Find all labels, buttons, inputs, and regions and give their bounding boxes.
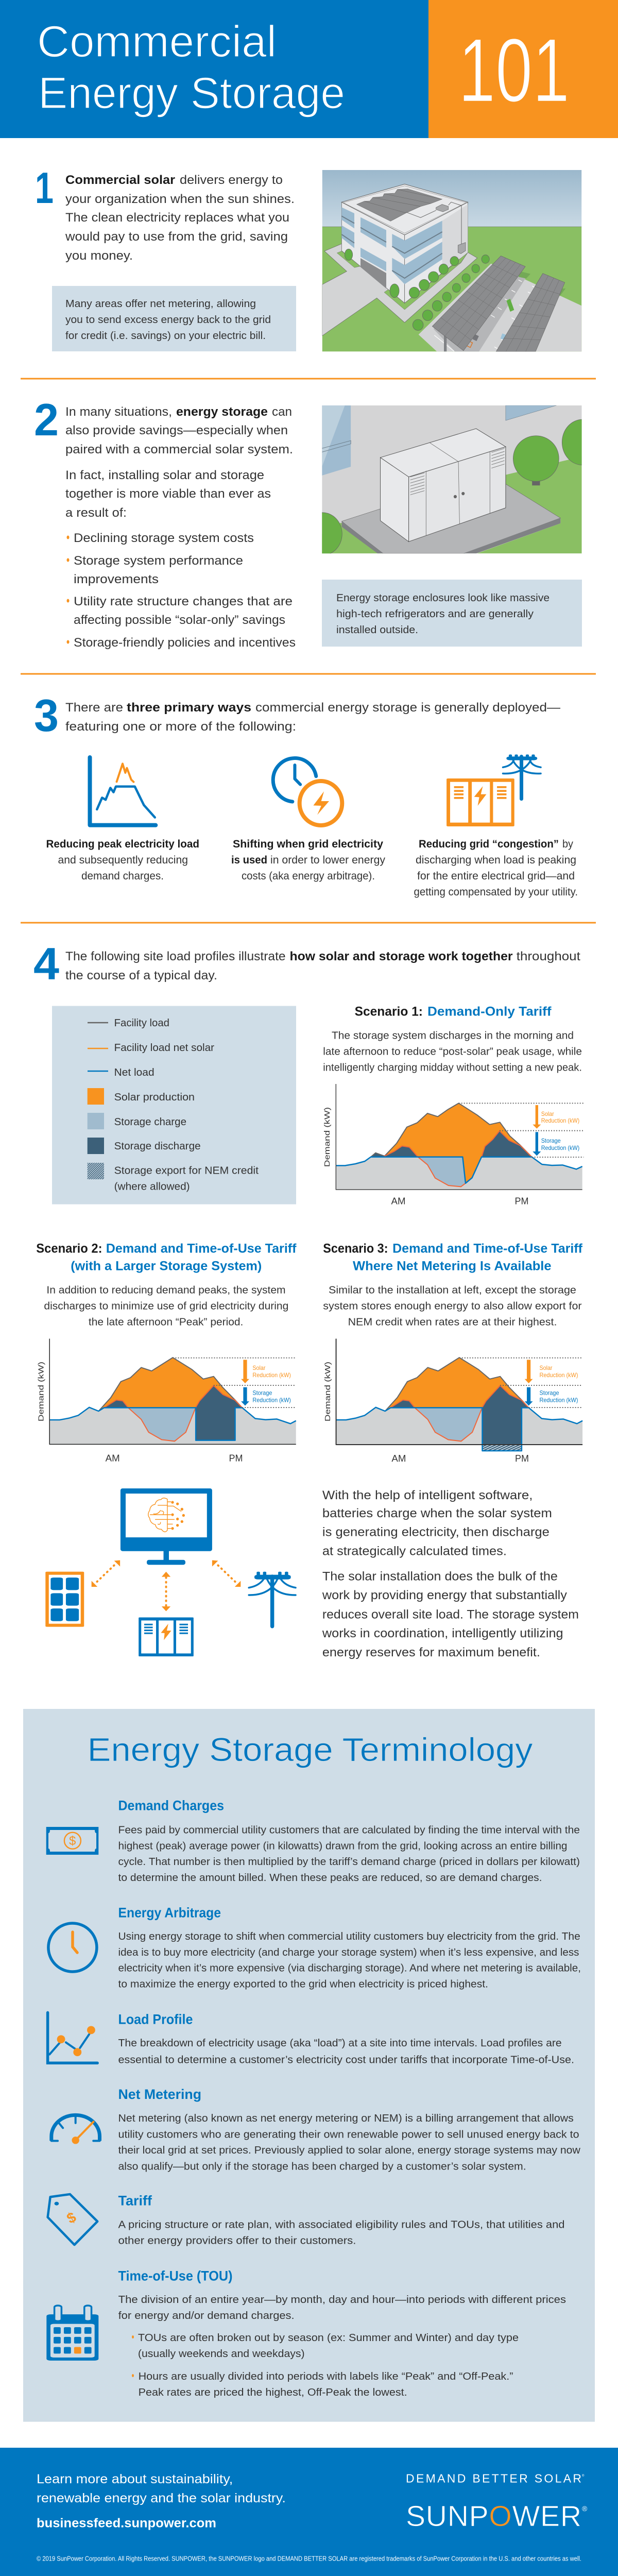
chart: scenario 1 load profile bbox=[323, 1084, 583, 1207]
panel: scenario 3 bbox=[323, 1242, 583, 1464]
icon: clock and energy coin bbox=[273, 758, 342, 825]
bullet list: reasons bbox=[67, 531, 296, 650]
term: energy arbitrage bbox=[48, 1905, 581, 1990]
icon: utility pole bbox=[249, 1572, 296, 1626]
section 1 text: delivers energy to bbox=[180, 173, 283, 187]
term: tariff: Tariff bbox=[118, 2193, 152, 2209]
legend: facility load: Facility load bbox=[114, 1018, 169, 1029]
section 2 intro text: energy storage bbox=[176, 405, 268, 419]
arrows: data flows between monitor and devices bbox=[92, 1560, 241, 1611]
heading: scenario 2 bbox=[36, 1242, 297, 1274]
chart: scenario 3 load profile: Reduction (kW) bbox=[540, 1397, 578, 1404]
callout: net metering: Many areas offer net metering, allowing bbox=[65, 298, 256, 310]
icon: gauge bbox=[52, 2115, 100, 2144]
header banner bbox=[0, 0, 618, 138]
term: net metering bbox=[52, 2087, 580, 2172]
callout: storage enclosures bbox=[322, 580, 582, 647]
chart: scenario 2 load profile: Reduction (kW) bbox=[252, 1371, 291, 1379]
section 3 intro text: three primary ways bbox=[127, 701, 251, 715]
callout: net metering: for credit (i.e. savings) on your electric bill. bbox=[65, 330, 266, 342]
term: net metering: their local grid at set prices. Previously applied to solar alone, energy storage systems may now bbox=[118, 2145, 580, 2156]
term: tariff: A pricing structure or rate plan, with associated eligibility rules and TOUs, that utilities and bbox=[118, 2219, 564, 2230]
panel: scenario 2 bbox=[36, 1242, 297, 1464]
way 3: reducing grid congestion bbox=[414, 754, 578, 898]
scenario 1 description bbox=[323, 1030, 582, 1074]
way 3 text: for the entire electrical grid—and bbox=[417, 870, 575, 882]
section 1 text: Commercial solar bbox=[65, 173, 175, 187]
bullet list: TOU notes: Hours are usually divided into periods with labels like “Peak” and “Off-Peak.” bbox=[139, 2371, 513, 2382]
call to action text: Learn more about sustainability, bbox=[37, 2472, 233, 2486]
section 2 intro text: together is more viable than ever as bbox=[65, 487, 271, 501]
chart: scenario 2 load profile: Demand (kW) bbox=[37, 1362, 46, 1421]
chart: scenario 1 load profile: Storage bbox=[541, 1137, 561, 1144]
section 3 intro text bbox=[65, 701, 560, 734]
panel: energy storage terminology bbox=[23, 1709, 595, 2422]
icon: load chart with clipped peak bbox=[90, 757, 156, 825]
legend: net load: Net load bbox=[114, 1067, 154, 1078]
call to action text: renewable energy and the solar industry. bbox=[37, 2491, 286, 2505]
section 2 intro text: In fact, installing solar and storage bbox=[65, 468, 264, 482]
chart: scenario 2 load profile: Reduction (kW) bbox=[252, 1397, 291, 1404]
explanatory text: With the help of intelligent software, bbox=[322, 1488, 533, 1502]
step number 2: 2 bbox=[34, 394, 59, 445]
legend: storage export: (where allowed) bbox=[114, 1181, 190, 1193]
step number 4: 4 bbox=[33, 938, 59, 989]
explanatory text: is generating electricity, then discharge bbox=[322, 1526, 550, 1539]
section 2 intro text: also provide savings—especially when bbox=[65, 423, 288, 437]
way 2 text: Shifting when grid electricity bbox=[233, 838, 383, 850]
icon: banknote bbox=[46, 1827, 98, 1855]
section 3 intro text: commercial energy storage is generally deployed— bbox=[255, 701, 560, 715]
chart: scenario 2 load profile bbox=[37, 1338, 296, 1464]
legend: facility load net solar: Facility load net solar bbox=[114, 1042, 214, 1054]
way 1 text: Reducing peak electricity load bbox=[46, 838, 199, 850]
way 2 text bbox=[231, 838, 385, 882]
term: time-of-use: Time-of-Use (TOU) bbox=[118, 2268, 233, 2283]
term: energy arbitrage: Energy Arbitrage bbox=[118, 1905, 221, 1921]
bullet list: TOU notes: TOUs are often broken out by season (ex: Summer and Winter) and day type bbox=[138, 2332, 519, 2344]
term: time-of-use: The division of an entire year—by month, day and hour—into periods with different prices bbox=[118, 2294, 566, 2306]
icon: line chart bbox=[48, 2012, 97, 2063]
heading: scenario 3: Demand and Time-of-Use Tariff bbox=[392, 1242, 583, 1256]
legend: storage discharge bbox=[88, 1138, 201, 1154]
title: Energy Storage bbox=[38, 69, 345, 118]
explanatory text: energy reserves for maximum benefit. bbox=[322, 1646, 540, 1659]
scenario 1 description: late afternoon to reduce “post-solar” peak usage, while bbox=[323, 1046, 582, 1057]
term: load profile: The breakdown of electricity usage (aka “load”) at a site into time intervals. Load profiles are bbox=[118, 2038, 562, 2049]
way 2: shifting when grid electricity is used bbox=[231, 758, 385, 882]
icon: brain bbox=[148, 1498, 185, 1532]
heading: scenario 3: Where Net Metering Is Available bbox=[353, 1259, 552, 1274]
term: load profile: Load Profile bbox=[118, 2012, 193, 2027]
term: demand charges: cycle. That number is then multiplied by the tariff’s demand charge (priced in dollars per kilowatt) bbox=[118, 1856, 580, 1868]
section 1 text: your organization when the sun shines. bbox=[65, 192, 295, 206]
tagline: demand better solar: DEMAND BETTER SOLAR bbox=[406, 2471, 581, 2485]
icon: clock bbox=[48, 1923, 97, 1972]
chart: scenario 2 load profile: PM bbox=[229, 1453, 243, 1464]
section 3: three primary ways bbox=[21, 674, 596, 898]
term: tariff: other energy providers offer to their customers. bbox=[118, 2235, 356, 2246]
scenario 2 description bbox=[44, 1285, 288, 1328]
logo: sunpower: SUNPOWER bbox=[406, 2500, 581, 2533]
section 4 intro text: throughout bbox=[517, 950, 580, 963]
section 2 intro text: can bbox=[272, 405, 292, 419]
way 1 text: and subsequently reducing bbox=[58, 854, 188, 866]
bullet list: reasons: Utility rate structure changes that are bbox=[74, 595, 293, 608]
legend: net load bbox=[88, 1067, 154, 1078]
heading: scenario 2: Demand and Time-of-Use Tariff bbox=[106, 1242, 297, 1256]
chart: scenario 3 load profile: Solar bbox=[540, 1364, 553, 1371]
term: demand charges: to determine the amount billed. When these peaks are reduced, so are demand charges. bbox=[118, 1872, 542, 1884]
scenario 1 description: The storage system discharges in the morning and bbox=[332, 1030, 574, 1041]
icon: storage unit bbox=[139, 1617, 194, 1656]
bullet list: TOU notes bbox=[132, 2332, 519, 2398]
illustration: energy storage enclosure bbox=[322, 405, 582, 553]
icon: storage cabinet and utility pole bbox=[447, 754, 541, 826]
title: Commercial bbox=[37, 17, 277, 66]
panel: scenario 1 bbox=[323, 1004, 583, 1207]
step number 1: 1 bbox=[35, 164, 54, 213]
section 4 intro text: how solar and storage work together bbox=[289, 950, 513, 963]
section 4 intro text bbox=[65, 950, 580, 982]
logo: sunpower: ® bbox=[582, 2504, 588, 2513]
callout: net metering: you to send excess energy back to the grid bbox=[65, 314, 271, 326]
section 3 intro text: featuring one or more of the following: bbox=[65, 720, 296, 734]
explanatory text: batteries charge when the solar system bbox=[322, 1506, 552, 1520]
term: time-of-use bbox=[46, 2268, 566, 2398]
heading: scenario 3: Scenario 3: bbox=[323, 1242, 388, 1256]
footer bbox=[0, 2448, 618, 2576]
section 2 intro text: a result of: bbox=[65, 506, 127, 520]
section 4: site load profiles bbox=[21, 923, 596, 1659]
term: load profile: essential to determine a customer’s electricity cost under tariffs that incorporate Time-of-Use. bbox=[118, 2054, 574, 2065]
section 2 intro text bbox=[65, 405, 293, 520]
section 3 intro text: There are bbox=[65, 701, 123, 715]
section 1 text: you money. bbox=[65, 249, 133, 263]
explanatory text: works in coordination, intelligently utilizing bbox=[322, 1626, 563, 1640]
icon: price tag bbox=[48, 2194, 97, 2245]
term: net metering: Net Metering bbox=[118, 2087, 201, 2102]
scenario 2 description: discharges to minimize use of grid electricity during bbox=[44, 1301, 288, 1312]
way 1: reducing peak load bbox=[46, 757, 199, 882]
section 4 intro text: the course of a typical day. bbox=[65, 969, 217, 982]
chart: scenario 3 load profile: AM bbox=[391, 1453, 406, 1464]
section 1 text: The clean electricity replaces what you bbox=[65, 211, 289, 225]
icon: calendar bbox=[46, 2306, 98, 2361]
way 1 text bbox=[46, 838, 199, 882]
term: net metering: utility customers who are generating their own renewable power to sell unused energy back to bbox=[118, 2129, 579, 2140]
term: energy arbitrage: to maximize the energy exported to the grid when electricity is priced highest. bbox=[118, 1979, 488, 1990]
way 2 text: in order to lower energy bbox=[270, 854, 385, 866]
section 2 intro text: In many situations, bbox=[65, 405, 172, 419]
icon: price tag: $ bbox=[64, 2209, 79, 2227]
chart: scenario 1 load profile: Reduction (kW) bbox=[541, 1117, 579, 1124]
section 2: energy storage bbox=[21, 379, 603, 650]
heading: scenario 2: Scenario 2: bbox=[36, 1242, 102, 1256]
chart: scenario 1 load profile: Reduction (kW) bbox=[541, 1144, 579, 1151]
way 1 text: demand charges. bbox=[81, 870, 164, 882]
chart: scenario 2 load profile: AM bbox=[106, 1453, 120, 1464]
heading: energy storage terminology: Energy Storage Terminology bbox=[88, 1731, 533, 1768]
way 3 text bbox=[414, 838, 578, 898]
chart: scenario 3 load profile: Storage bbox=[540, 1389, 559, 1397]
chart: scenario 2 load profile: Solar bbox=[252, 1364, 265, 1371]
term: time-of-use: for energy and/or demand charges. bbox=[118, 2310, 295, 2321]
callout: storage enclosures: installed outside. bbox=[336, 624, 418, 636]
way 3 text: by bbox=[562, 838, 573, 850]
diagram: intelligent software connecting solar, storage and grid bbox=[45, 1488, 579, 1659]
explanatory text: The solar installation does the bulk of the bbox=[322, 1570, 558, 1584]
way 2 text: costs (aka energy arbitrage). bbox=[242, 870, 375, 882]
section 1 text: would pay to use from the grid, saving bbox=[65, 230, 288, 244]
callout: storage enclosures: high-tech refrigerators and are generally bbox=[336, 608, 534, 620]
legend: storage export bbox=[88, 1163, 259, 1193]
term: energy arbitrage: Using energy storage to shift when commercial utility customers buy electricity from the grid. The bbox=[118, 1931, 580, 1942]
bullet list: reasons: Storage-friendly policies and incentives bbox=[74, 636, 296, 650]
section 4 intro text: The following site load profiles illustrate bbox=[65, 950, 286, 963]
section 2 intro text: paired with a commercial solar system. bbox=[65, 443, 293, 456]
chart: scenario 1 load profile: PM bbox=[515, 1196, 528, 1207]
bullet list: reasons: improvements bbox=[74, 572, 159, 586]
heading: scenario 1 bbox=[355, 1004, 552, 1019]
illustration: commercial building with rooftop solar and solar carports bbox=[322, 170, 581, 351]
scenario 3 description: Similar to the installation at left, except the storage bbox=[329, 1285, 576, 1296]
way 2 text: is used bbox=[231, 854, 267, 866]
chart: scenario 1 load profile: Solar bbox=[541, 1110, 554, 1117]
chart: scenario 3 load profile: Reduction (kW) bbox=[540, 1371, 578, 1379]
way 3 text: Reducing grid “congestion” bbox=[419, 838, 559, 850]
term: load profile bbox=[48, 2012, 574, 2065]
panel: chart legend bbox=[52, 1006, 296, 1205]
chart: scenario 3 load profile: Demand (kW) bbox=[323, 1362, 332, 1421]
legend: solar production: Solar production bbox=[114, 1092, 195, 1103]
bullet list: TOU notes: Peak rates are priced the highest, Off-Peak the lowest. bbox=[139, 2387, 407, 2398]
chart: scenario 3 load profile: PM bbox=[515, 1453, 529, 1464]
term: net metering: also qualify—but only if the storage has been charged by a customer’s solar system. bbox=[118, 2161, 526, 2172]
chart: scenario 1 load profile: AM bbox=[391, 1196, 406, 1207]
scenario 3 description: NEM credit when rates are at their highest. bbox=[348, 1316, 557, 1328]
title number 101: 101 bbox=[458, 20, 570, 121]
legend: storage export: Storage export for NEM credit bbox=[114, 1165, 259, 1177]
scenario 2 description: In addition to reducing demand peaks, the system bbox=[46, 1285, 286, 1296]
scenario 2 description: the late afternoon “Peak” period. bbox=[89, 1316, 243, 1328]
term: demand charges: Fees paid by commercial utility customers that are calculated by finding the time interval with the bbox=[118, 1824, 580, 1836]
term: energy arbitrage: electricity when it’s more expensive (via discharging storage). And where net metering is available, bbox=[118, 1963, 581, 1974]
explanatory text: work by providing energy that substantially bbox=[322, 1588, 567, 1602]
call to action text: businessfeed.sunpower.com bbox=[37, 2516, 216, 2531]
term: energy arbitrage: idea is to buy more electricity (and charge your storage system) when it’s less expensive, and less bbox=[118, 1947, 579, 1958]
chart: scenario 3 load profile bbox=[323, 1338, 582, 1464]
bullet list: TOU notes: (usually weekends and weekdays) bbox=[138, 2348, 305, 2360]
chart: scenario 2 load profile: Storage bbox=[252, 1389, 272, 1397]
bullet list: reasons: Storage system performance bbox=[74, 554, 243, 568]
term: demand charges: Demand Charges bbox=[118, 1798, 224, 1813]
scenario 1 description: intelligently charging midday without setting a new peak. bbox=[323, 1062, 582, 1074]
step number 3: 3 bbox=[34, 690, 59, 741]
heading: scenario 1: Scenario 1: bbox=[355, 1004, 423, 1019]
icon: solar panel bbox=[45, 1572, 84, 1627]
callout: storage enclosures: Energy storage enclosures look like massive bbox=[336, 592, 550, 604]
term: net metering: Net metering (also known as net energy metering or NEM) is a billing arrangement that allows bbox=[118, 2113, 574, 2124]
chart: scenario 1 load profile: Demand (kW) bbox=[323, 1107, 332, 1167]
legend: storage charge bbox=[88, 1113, 186, 1129]
section 1 text bbox=[65, 173, 295, 263]
legend: storage discharge: Storage discharge bbox=[114, 1141, 201, 1152]
way 3 text: getting compensated by your utility. bbox=[414, 886, 578, 898]
term: demand charges: highest (peak) average power (in kilowatts) drawn from the grid, looking across an entire billing bbox=[118, 1840, 568, 1852]
bullet list: reasons: affecting possible “solar-only” savings bbox=[74, 613, 285, 627]
legend: storage charge: Storage charge bbox=[114, 1116, 186, 1128]
heading: scenario 2: (with a Larger Storage System) bbox=[71, 1259, 262, 1274]
call to action text bbox=[37, 2472, 286, 2531]
explanatory text: at strategically calculated times. bbox=[322, 1544, 507, 1558]
term: tariff bbox=[48, 2193, 565, 2246]
scenario 3 description bbox=[323, 1285, 582, 1328]
bullet list: reasons: Declining storage system costs bbox=[74, 531, 254, 545]
callout: net metering bbox=[52, 286, 296, 351]
explanatory text bbox=[322, 1488, 579, 1659]
term: demand charges bbox=[46, 1798, 580, 1884]
heading: scenario 1: Demand-Only Tariff bbox=[427, 1004, 552, 1019]
legend: solar production bbox=[88, 1088, 195, 1105]
icon: banknote: $ bbox=[69, 1834, 76, 1848]
title bbox=[37, 17, 345, 118]
heading: scenario 3 bbox=[323, 1242, 583, 1274]
explanatory text: reduces overall site load. The storage system bbox=[322, 1608, 579, 1622]
icon: monitor with brain bbox=[121, 1488, 212, 1565]
tagline: demand better solar: ® bbox=[582, 2474, 585, 2478]
way 3 text: discharging when load is peaking bbox=[416, 854, 576, 866]
scenario 3 description: system stores enough energy to also allow export for bbox=[323, 1301, 582, 1312]
section 1: commercial solar bbox=[35, 164, 581, 351]
